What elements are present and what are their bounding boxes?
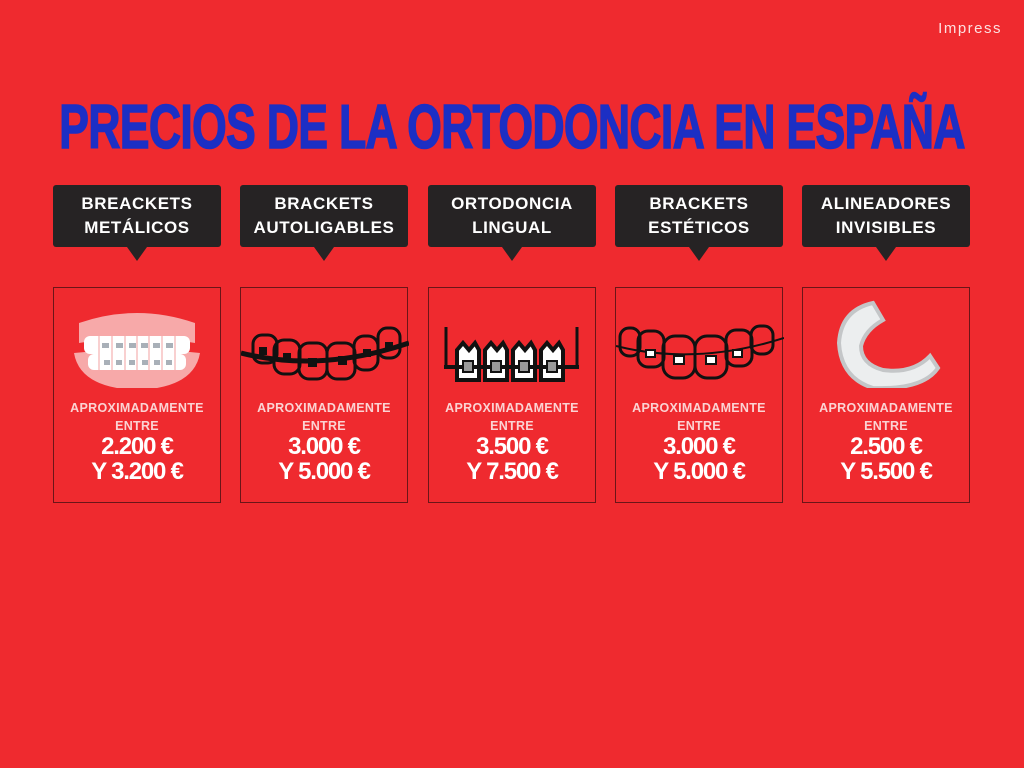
price: Y 5.500 € xyxy=(840,458,932,485)
text: aproximadamente entre: APROXIMADAMENTE xyxy=(445,401,579,415)
text: aproximadamente entre xyxy=(257,401,391,433)
price: 3.000 € xyxy=(663,433,735,460)
price xyxy=(466,433,558,485)
price xyxy=(91,433,184,485)
text: aproximadamente entre: ENTRE xyxy=(864,419,908,433)
price: Y 5.000 € xyxy=(653,458,745,485)
price: Y 5.000 € xyxy=(278,458,370,485)
text: aproximadamente entre: APROXIMADAMENTE xyxy=(632,401,766,415)
card: estéticos xyxy=(615,287,783,503)
title: PRECIOS DE LA ORTODONCIA EN ESPAÑA xyxy=(59,93,965,162)
card: metálicos xyxy=(53,287,221,503)
text: aproximadamente entre xyxy=(632,401,766,433)
label: brackets autoligables xyxy=(240,185,408,247)
text: aproximadamente entre: APROXIMADAMENTE xyxy=(819,401,953,415)
icon: teeth with metal braces xyxy=(74,313,200,388)
brand: Impress xyxy=(938,20,1002,37)
icon: self-ligating braces xyxy=(241,326,409,380)
label: ortodoncia lingual: ORTODONCIA xyxy=(451,194,573,213)
label: brackets estéticos: BRACKETS xyxy=(649,194,749,213)
label: ortodoncia lingual xyxy=(428,185,596,247)
price: 2.200 € xyxy=(101,433,173,460)
icon: aesthetic braces xyxy=(616,324,784,380)
text: aproximadamente entre: ENTRE xyxy=(115,419,159,433)
label: breackets metálicos: METÁLICOS xyxy=(84,218,190,237)
text: aproximadamente entre: APROXIMADAMENTE xyxy=(70,401,204,415)
label: alineadores invisibles xyxy=(802,185,970,247)
card: invisibles xyxy=(802,287,970,503)
text: aproximadamente entre: ENTRE xyxy=(677,419,721,433)
label: brackets autoligables: AUTOLIGABLES xyxy=(253,218,394,237)
price: 3.000 € xyxy=(288,433,360,460)
label: brackets autoligables: BRACKETS xyxy=(274,194,374,213)
price: Y 3.200 € xyxy=(91,458,183,485)
price xyxy=(653,433,746,485)
icon: lingual braces xyxy=(444,327,579,382)
price xyxy=(840,433,932,485)
label: alineadores invisibles: ALINEADORES xyxy=(821,194,951,213)
text: aproximadamente entre xyxy=(70,401,204,433)
label: alineadores invisibles: INVISIBLES xyxy=(836,218,936,237)
label: breackets metálicos: BREACKETS xyxy=(81,194,193,213)
text: aproximadamente entre xyxy=(819,401,953,433)
text: aproximadamente entre: ENTRE xyxy=(302,419,346,433)
label: brackets estéticos xyxy=(615,185,783,247)
label: breackets metálicos xyxy=(53,185,221,247)
text: aproximadamente entre xyxy=(445,401,579,433)
label: ortodoncia lingual: LINGUAL xyxy=(472,218,552,237)
price xyxy=(278,433,370,485)
text: aproximadamente entre: ENTRE xyxy=(490,419,534,433)
price: 2.500 € xyxy=(850,433,922,460)
price: 3.500 € xyxy=(476,433,548,460)
card: autoligables xyxy=(240,287,408,503)
card: lingual xyxy=(428,287,596,503)
text: aproximadamente entre: APROXIMADAMENTE xyxy=(257,401,391,415)
icon: clear aligner xyxy=(837,300,940,388)
price: Y 7.500 € xyxy=(466,458,558,485)
label: brackets estéticos: ESTÉTICOS xyxy=(648,218,750,237)
